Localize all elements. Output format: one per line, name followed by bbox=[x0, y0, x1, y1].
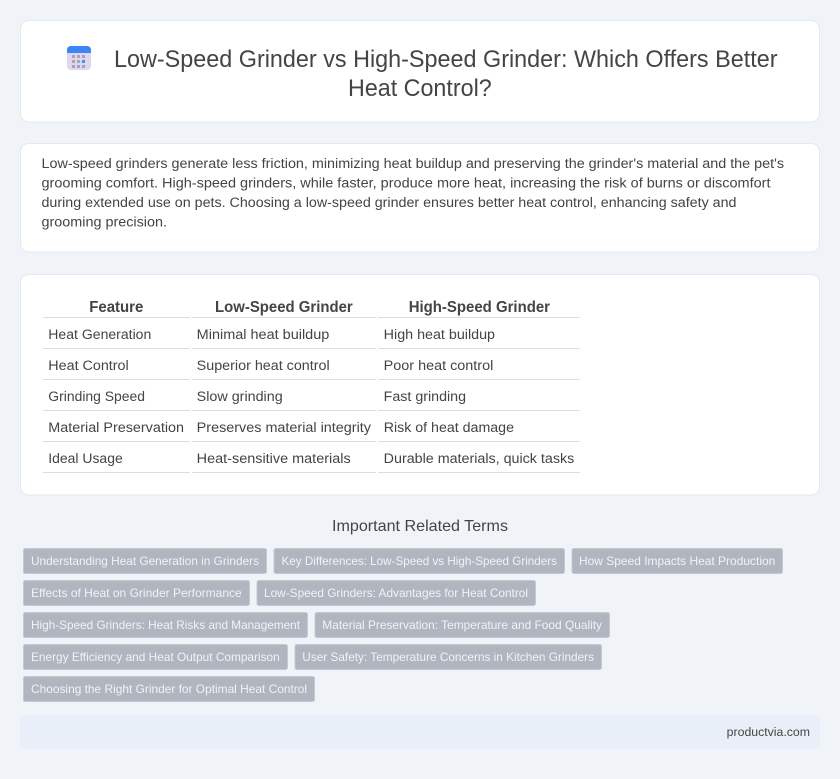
footer source text: productvia.com bbox=[727, 725, 810, 739]
table header bbox=[43, 299, 580, 318]
tag bbox=[257, 580, 536, 606]
tag: Choosing the Right Grinder for Optimal Heat Control bbox=[31, 682, 307, 696]
icon: calendar bbox=[67, 46, 91, 70]
table row: ideal usage: Durable materials, quick tasks bbox=[384, 451, 574, 467]
table row: material preservation: Material Preservation bbox=[48, 420, 184, 436]
tag bbox=[315, 612, 610, 638]
tag bbox=[24, 612, 308, 638]
table row: material preservation: Preserves material integrity bbox=[197, 420, 372, 436]
table header: High-Speed Grinder bbox=[409, 299, 550, 316]
table row: grinding speed: Slow grinding bbox=[197, 389, 283, 405]
tag list: related terms bbox=[24, 548, 782, 702]
tag bbox=[24, 676, 314, 702]
table row: material preservation: Risk of heat damage bbox=[384, 420, 514, 436]
tag: Energy Efficiency and Heat Output Comparison bbox=[31, 650, 280, 664]
panel: comparison table bbox=[20, 274, 820, 495]
table row: ideal usage: Ideal Usage bbox=[48, 451, 123, 467]
table row: heat control: Heat Control bbox=[48, 358, 129, 374]
tag bbox=[24, 580, 250, 606]
table row: ideal usage bbox=[43, 451, 580, 473]
table row: ideal usage: Heat-sensitive materials bbox=[197, 451, 351, 467]
text block: summary paragraph: grooming precision. bbox=[42, 214, 167, 230]
text block: summary paragraph: grooming comfort. High-speed grinders, while faster, produce more heat, increasing the risk of burns or discomfort bbox=[42, 176, 771, 192]
tag bbox=[274, 548, 564, 574]
heading bbox=[114, 47, 778, 102]
table row: heat control: Superior heat control bbox=[197, 358, 330, 374]
tag: High-Speed Grinders: Heat Risks and Management bbox=[31, 618, 301, 632]
table row: grinding speed bbox=[43, 389, 580, 411]
tag: User Safety: Temperature Concerns in Kitchen Grinders bbox=[302, 650, 594, 664]
table header: Feature bbox=[89, 299, 144, 316]
tag: Effects of Heat on Grinder Performance bbox=[31, 586, 242, 600]
tag bbox=[572, 548, 782, 574]
panel: title bbox=[20, 20, 820, 122]
heading: Low-Speed Grinder vs High-Speed Grinder: Which Offers Better bbox=[114, 47, 778, 73]
table row: material preservation bbox=[43, 420, 580, 442]
tag bbox=[24, 548, 266, 574]
table row: heat generation: Minimal heat buildup bbox=[197, 327, 329, 343]
footer bbox=[20, 715, 820, 749]
tag bbox=[24, 644, 288, 670]
table row: heat control: Poor heat control bbox=[384, 358, 493, 374]
panel: summary bbox=[20, 144, 820, 252]
tag: How Speed Impacts Heat Production bbox=[579, 554, 775, 568]
text block: summary paragraph bbox=[42, 156, 784, 230]
tag: Key Differences: Low-Speed vs High-Speed Grinders bbox=[282, 554, 557, 568]
text block: summary paragraph: during extended use on pets. Choosing a low-speed grinder ensures better heat control, enhancing safety and bbox=[42, 195, 736, 211]
table row: heat generation bbox=[43, 327, 580, 349]
tag: Material Preservation: Temperature and Food Quality bbox=[322, 618, 602, 632]
tag bbox=[295, 644, 602, 670]
tag: Low-Speed Grinders: Advantages for Heat Control bbox=[264, 586, 528, 600]
tag: Understanding Heat Generation in Grinders bbox=[31, 554, 259, 568]
table row: heat generation: High heat buildup bbox=[384, 327, 495, 343]
table header: Low-Speed Grinder bbox=[215, 299, 353, 316]
table row: grinding speed: Fast grinding bbox=[384, 389, 466, 405]
heading: important related terms: Important Related Terms bbox=[332, 518, 508, 535]
heading: Heat Control? bbox=[348, 76, 492, 102]
table row: grinding speed: Grinding Speed bbox=[48, 389, 145, 405]
table row: heat control bbox=[43, 358, 580, 380]
table row: heat generation: Heat Generation bbox=[48, 327, 151, 343]
text block: summary paragraph: Low-speed grinders generate less friction, minimizing heat buildup and preserving the grinder's material and the pet's bbox=[42, 156, 784, 172]
